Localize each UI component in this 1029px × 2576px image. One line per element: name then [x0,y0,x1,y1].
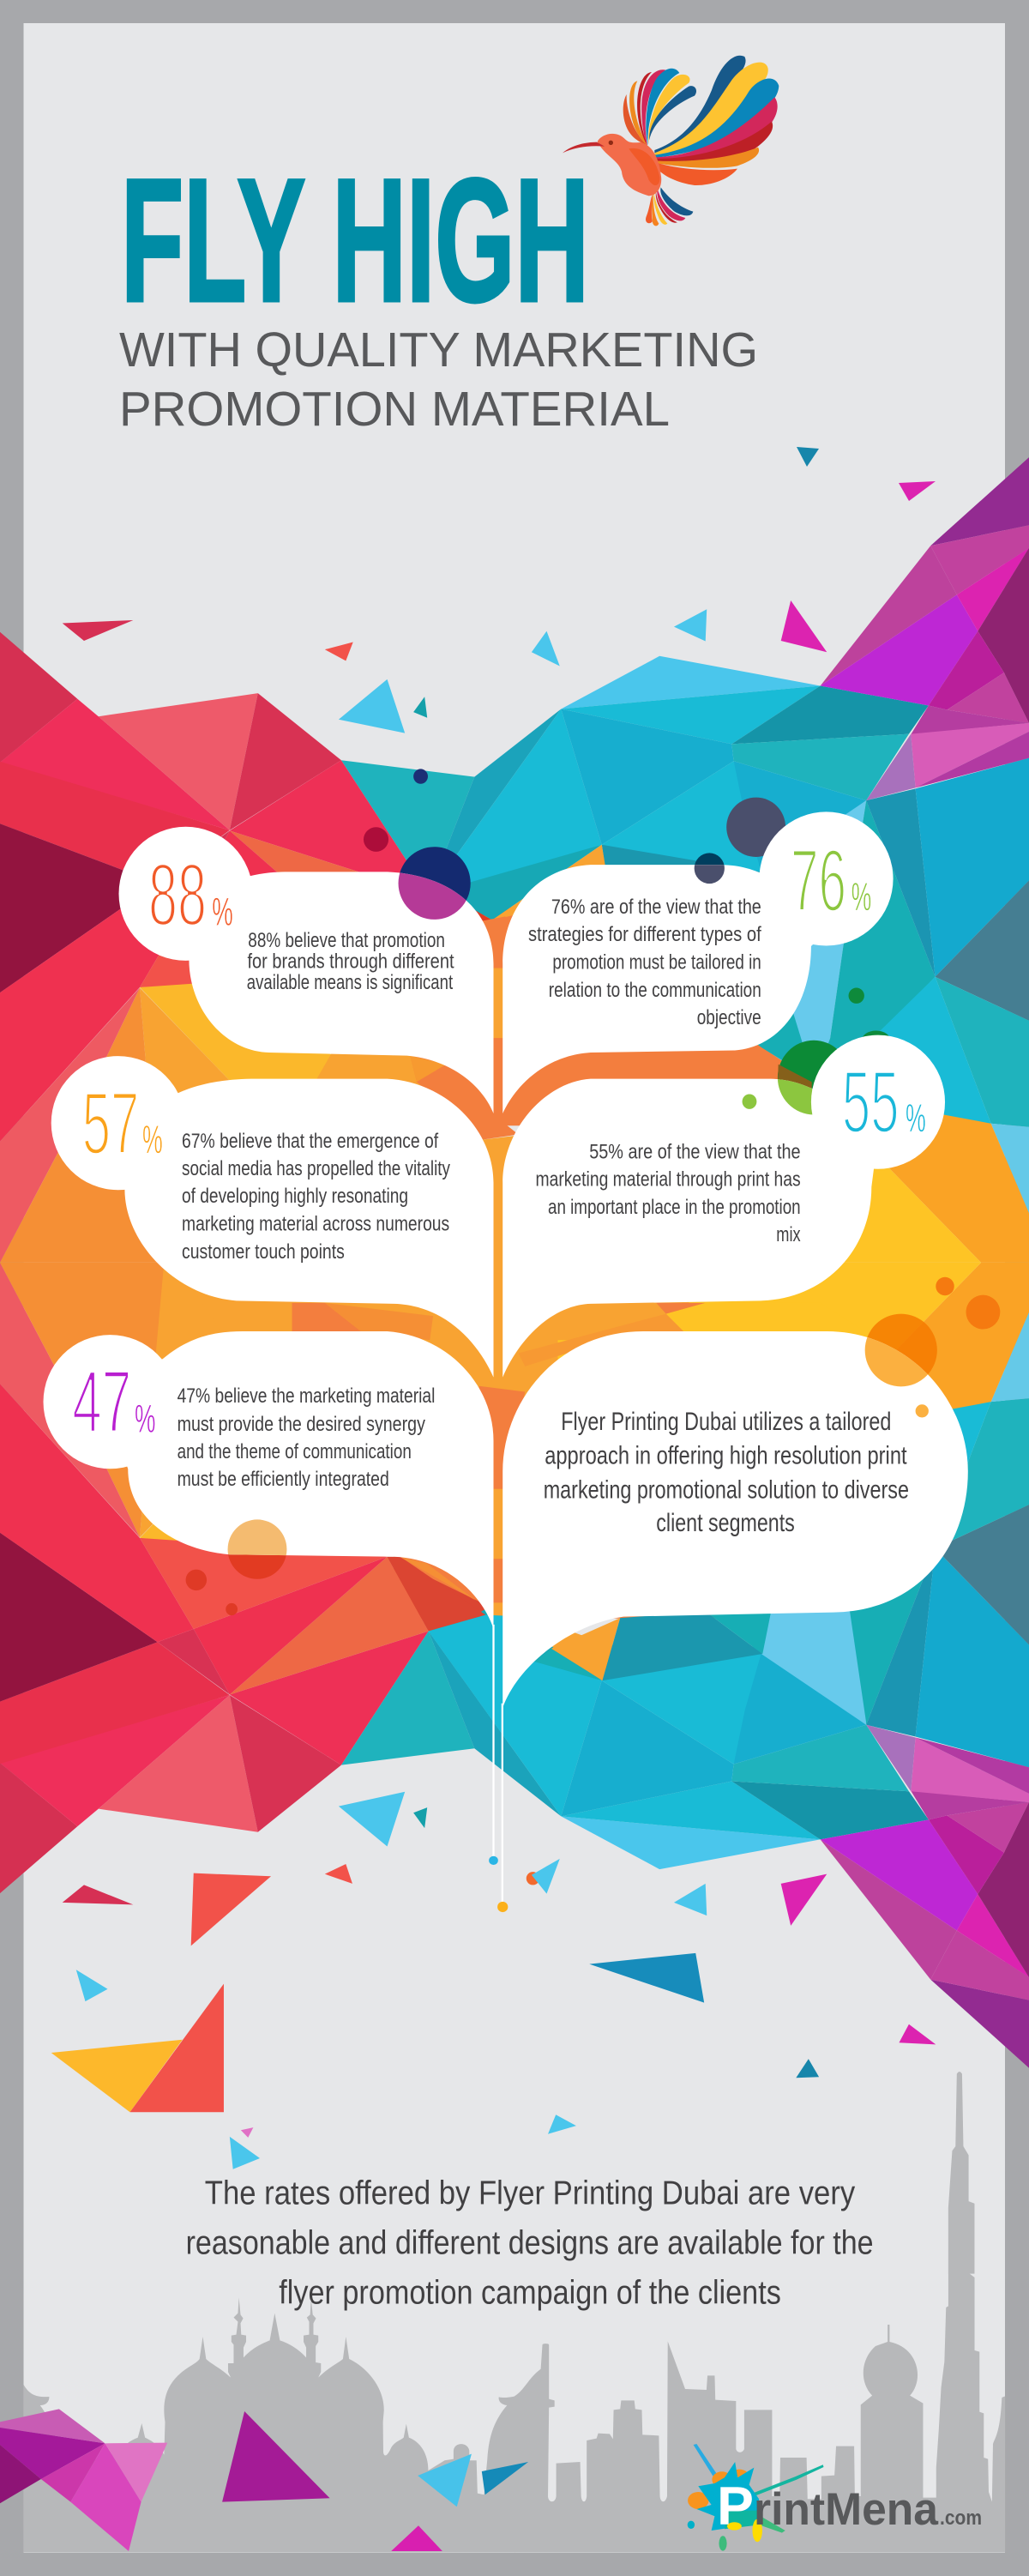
text: 57%: 67% believe that the emergence of [182,1130,438,1153]
text: 47%: 47 [72,1352,131,1451]
subtitle: PROMOTION MATERIAL [119,382,670,437]
text: 76%: 76% are of the view that the [551,896,761,919]
bubble circle: 55% [811,1035,945,1169]
text: flyer printing statement: approach in offering high resolution print [545,1442,907,1470]
logo: PrintMena.com [688,2444,982,2551]
lower frame band [0,2553,1029,2576]
text: 57%: % [142,1117,163,1161]
bubble: 57% [51,1056,494,1378]
skyline: towers [514,2273,1005,2553]
text: 47%: and the theme of communication [178,1440,412,1463]
text: 57%: social media has propelled the vitality [182,1157,450,1180]
icon: hummingbird [563,56,779,226]
centre mosaic patches [197,902,886,1739]
text: 55%: an important place in the promotion [548,1196,801,1219]
stem lines with end dots [489,1625,539,1912]
logo: PrintMena.com: rintMena [754,2484,939,2535]
translucent dots over bubbles [228,847,937,1579]
mosaic bottom half [0,1263,1029,2068]
text: 55%: 55 [842,1053,899,1151]
title: FLY HIGH [121,142,589,338]
decorative dots under bubbles [186,769,1000,1615]
closing text: reasonable and different designs are available for the [186,2225,874,2262]
text: 76%: promotion must be tailored in [552,951,761,974]
text: flyer printing statement: marketing promotional solution to diverse [544,1475,909,1504]
text: 57%: of developing highly resonating [182,1185,408,1208]
text: 47%: % [135,1396,156,1440]
bubble: 88% [119,827,494,1113]
text: 76%: 76 [791,831,846,930]
bubble: 76% [502,811,894,1113]
text: flyer printing statement: client segments [656,1509,795,1537]
closing text [186,2175,874,2311]
text: 55% [535,1053,926,1246]
text: 88% [148,846,454,994]
text: 47%: 47% believe the marketing material [178,1385,435,1408]
bottom left purple shards and triangles [0,2409,528,2551]
skyline: mosque and domes [24,2297,515,2553]
bubble: 55% [502,1079,880,1378]
text: 76%: % [851,874,871,919]
polygon mosaic background [0,457,1029,2068]
floating triangles lower field [63,1792,827,1946]
subtitle [119,323,758,437]
closing text: flyer promotion campaign of the clients [279,2275,781,2311]
text: flyer printing statement: Flyer Printing Dubai utilizes a tailored [561,1408,891,1436]
text: 57%: customer touch points [182,1240,345,1264]
text: 47% [72,1352,435,1491]
mosaic top half [0,457,1029,1263]
text: 88%: % [212,890,233,934]
small floating triangles top [797,447,936,501]
text: 76%: strategies for different types of [528,923,761,946]
logo: PrintMena.com: .com [940,2507,982,2530]
text: 76%: relation to the communication [549,979,761,1002]
text: 47%: must be efficiently integrated [178,1468,389,1491]
text: 55%: 55% are of the view that the [589,1141,801,1163]
floating triangles upper field [63,600,827,733]
text: 57%: marketing material across numerous [182,1213,449,1236]
text: 55%: mix [776,1223,801,1246]
text: 55%: % [906,1095,926,1140]
logo paint splatter [688,2444,824,2551]
text: 88%: for brands through different [247,950,454,974]
Dubai skyline silhouette [24,2072,1005,2553]
text: 47%: must provide the desired synergy [178,1413,425,1436]
skyline: tower spire [948,2072,974,2274]
text: 55%: marketing material through print has [535,1168,801,1191]
subtitle: WITH QUALITY MARKETING [119,323,758,377]
text: 88%: 88% believe that promotion [248,929,445,952]
text: 88%: available means is significant [247,971,453,994]
text: 76% [528,831,871,1029]
closing text: The rates offered by Flyer Printing Dubai are very [205,2175,856,2212]
bubble: 47% [44,1331,494,1629]
text: flyer printing statement [544,1408,909,1537]
triangles above closing text [51,1953,936,2169]
text: 88%: 88 [148,846,207,944]
bubble: flyer printing statement [502,1331,968,1708]
text: 57% [82,1074,450,1264]
text: 76%: objective [697,1006,761,1029]
text: 57%: 57 [82,1074,139,1173]
logo wordmark: P [717,2476,754,2537]
